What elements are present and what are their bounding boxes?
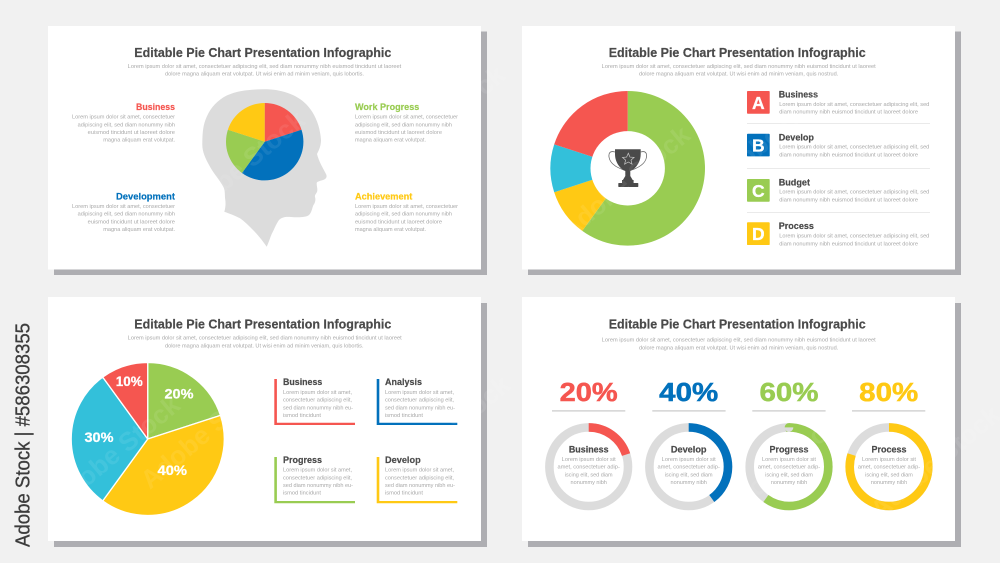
item A: business [747,90,929,116]
item C: budget: diam nonummy nibh euismod tincidunt ut laoreet dolore [779,197,918,203]
item D: process [747,221,929,247]
bracket: progress: Lorem ipsum dolor sit amet, [283,468,353,474]
bracket: business: sed diam nonummy nibh eu- [283,405,353,411]
bracket: analysis: Lorem ipsum dolor sit amet, [385,390,455,396]
donut chart [550,91,705,246]
bracket: progress [274,455,355,503]
intro text: Lorem ipsum dolor sit amet, consectetuer adipiscing elit, sed diam nonummy nibh euismod tincidunt ut laoreet [128,64,402,70]
ring card: 60% progress: Lorem ipsum dolor sit [762,457,817,463]
pie labels: 10% [116,374,143,389]
ring card: 20% business [549,379,628,506]
watermark: Adobe Stock [705,69,846,195]
bracket: business [274,377,355,425]
bracket: analysis: sed diam nonummy nibh eu- [385,405,455,411]
bracket: progress: sed diam nonummy nibh eu- [283,483,353,489]
watermark: Adobe Stock [555,119,696,245]
item A: business: Business [779,90,818,101]
text block: business: Business [136,102,175,113]
intro text: dolore magna aliquam erat volutpat. Ut wisi enim ad minim veniam, quis nostrud. [639,72,838,78]
bracket: progress: consectetuer adipiscing elit, [283,475,353,481]
text block: business [72,102,175,144]
item B: develop: Develop [779,132,814,143]
ring card: 80% process: Process [872,445,906,456]
item C: budget [747,177,929,203]
item B: develop: B [752,136,765,156]
item D: process: diam nonummy nibh euismod tincidunt ut laoreet dolore [779,241,918,247]
ring card: 80% process: amet, consectetuer adip- [858,465,920,471]
text block: achievement [355,191,458,233]
bracket: progress: ismod tincidunt [283,491,322,497]
ring card: 40% develop: Lorem ipsum dolor sit [662,457,716,463]
intro text [602,338,876,351]
ring card: 40% develop: nonummy nibh [671,480,707,486]
text block: achievement: euismod tincidunt ut laoreet dolore [355,219,442,225]
panel: brain pie chart [48,26,487,275]
ring card: 20% business: nonummy nibh [571,480,607,486]
ring card: 80% process: nonummy nibh [871,480,907,486]
text block: work progress: magna aliquam erat volutpat. [355,138,426,144]
heading: Editable Pie Chart Presentation Infographic [609,316,866,331]
text block: achievement: adipiscing elit, sed diam nonummy nibh [355,212,452,218]
watermark: Adobe Stock [40,49,181,175]
text block: development: magna aliquam erat volutpat. [103,227,175,233]
ring card: 40% develop [649,379,728,506]
bracket: business: Business [283,377,322,388]
watermark: Adobe Stock [715,399,856,525]
intro text [128,64,402,78]
item A: business: A [752,93,765,113]
bracket: analysis: ismod tincidunt [385,413,424,419]
bracket: develop: sed diam nonummy nibh eu- [385,483,455,489]
ring card: 40% develop: iscing elit, sed diam [665,472,713,478]
text block: work progress [355,102,458,144]
text block: development: adipiscing elit, sed diam nonummy nibh [78,212,175,218]
ring card: 20% business: iscing elit, sed diam [565,472,613,478]
panel: donut chart with trophy [522,26,961,275]
bracket: business: consectetuer adipiscing elit, [283,398,353,404]
side label: stock id: Adobe Stock | #586308355 [12,323,34,547]
text block: work progress: euismod tincidunt ut laoreet dolore [355,130,442,136]
watermark: Adobe Stock [135,369,276,495]
text block: development: Development [116,191,176,202]
watermark: Adobe Stock [170,104,311,230]
heading: Editable Pie Chart Presentation Infographic [134,316,391,331]
bracket: develop: consectetuer adipiscing elit, [385,475,455,481]
item D: process: D [752,224,765,244]
item A: business: diam nonummy nibh euismod tincidunt ut laoreet dolore [779,110,918,116]
bracket: develop [377,455,457,503]
bracket: develop: Lorem ipsum dolor sit amet, [385,468,455,474]
ring card: 80% process: Lorem ipsum dolor sit [862,457,917,463]
ring card: 60% progress: 60% [760,379,818,407]
intro text: dolore magna aliquam erat volutpat. Ut wisi enim ad minim veniam, quis nostrud. [639,345,838,351]
ring card: 20% business: Lorem ipsum dolor sit [562,457,616,463]
text block: business: adipiscing elit, sed diam nonummy nibh [78,122,175,128]
ring card: 40% develop: amet, consectetuer adip- [658,465,720,471]
intro text [602,64,876,78]
pie labels: 30% [84,430,114,445]
heading: Editable Pie Chart Presentation Infographic [134,45,391,60]
text block: business: Lorem ipsum dolor sit amet, consectetuer [72,115,175,121]
intro text: Lorem ipsum dolor sit amet, consectetuer adipiscing elit, sed diam nonummy nibh euismod tincidunt ut laoreet [128,336,402,342]
bracket: analysis: consectetuer adipiscing elit, [385,398,455,404]
bracket: analysis: Analysis [385,377,422,388]
panel: percentage pie chart [48,297,487,547]
watermark: Adobe Stock [375,369,516,495]
intro text [128,336,402,349]
text block: work progress: adipiscing elit, sed diam nonummy nibh [355,122,452,128]
intro text: Lorem ipsum dolor sit amet, consectetuer adipiscing elit, sed diam nonummy nibh euismod tincidunt ut laoreet [602,338,876,344]
text block: achievement: magna aliquam erat volutpat. [355,227,426,233]
text block: achievement: Achievement [355,191,413,202]
bracket: analysis [377,377,457,425]
text block: work progress: Work Progress [355,102,419,113]
panel: progress rings [522,297,961,547]
bracket: business: Lorem ipsum dolor sit amet, [283,390,353,396]
ring card: 80% process [850,379,928,506]
item C: budget: C [752,181,765,201]
ring card: 20% business: Business [569,445,609,456]
heading: Editable Pie Chart Presentation Infographic [609,45,866,60]
watermark: Adobe Stock [45,389,186,515]
ring card: 60% progress: iscing elit, sed diam [765,472,813,478]
text block: development: Lorem ipsum dolor sit amet, consectetuer [72,204,175,210]
item B: develop: Lorem ipsum dolor sit amet, consectetuer adipiscing elit, sed [779,145,929,151]
bracket: business: ismod tincidunt [283,413,322,419]
text block: development [72,191,176,233]
pie chart [71,362,224,516]
ring card: 60% progress: nonummy nibh [771,480,807,486]
intro text: dolore magna aliquam erat volutpat. Ut wisi enim ad minim veniam, quis lobortis. [165,72,364,78]
ring card: 40% develop: 40% [659,379,718,407]
ring card: 80% process: iscing elit, sed diam [865,472,913,478]
item B: develop [747,132,929,158]
text block: business: euismod tincidunt ut laoreet dolore [88,130,175,136]
text block: development: euismod tincidunt ut laoreet dolore [88,219,175,225]
item D: process: Lorem ipsum dolor sit amet, consectetuer adipiscing elit, sed [779,234,929,240]
text block: work progress: Lorem ipsum dolor sit amet, consectetuer [355,115,458,121]
intro text: Lorem ipsum dolor sit amet, consectetuer adipiscing elit, sed diam nonummy nibh euismod tincidunt ut laoreet [602,64,876,70]
ring card: 60% progress: amet, consectetuer adip- [758,465,820,471]
ring card: 60% progress: Progress [770,445,808,456]
ring card: 20% business: amet, consectetuer adip- [558,465,620,471]
item C: budget: Budget [779,177,811,188]
ring card: 60% progress [750,379,828,506]
watermark: Adobe Stock [370,59,511,185]
icon: head silhouette [202,89,327,247]
item C: budget: Lorem ipsum dolor sit amet, consectetuer adipiscing elit, sed [779,190,929,196]
text block: achievement: Lorem ipsum dolor sit amet, consectetuer [355,204,458,210]
bracket: develop: Develop [385,455,421,466]
item B: develop: diam nonummy nibh euismod tincidunt ut laoreet dolore [779,152,918,158]
pie labels [84,374,194,478]
item A: business: Lorem ipsum dolor sit amet, consectetuer adipiscing elit, sed [779,102,929,108]
icon: trophy [609,149,647,187]
pie labels: 40% [158,463,187,478]
ring card: 20% business: 20% [560,379,618,407]
text block: business: magna aliquam erat volutpat. [103,138,175,144]
bracket: develop: ismod tincidunt [385,491,424,497]
pie chart in head [226,103,303,180]
pie labels: 20% [164,387,194,402]
item D: process: Process [779,221,814,232]
ring card: 80% process: 80% [859,379,918,407]
intro text: dolore magna aliquam erat volutpat. Ut wisi enim ad minim veniam, quis lobortis. [165,343,364,349]
ring card: 40% develop: Develop [671,445,707,456]
bracket: progress: Progress [283,455,322,466]
